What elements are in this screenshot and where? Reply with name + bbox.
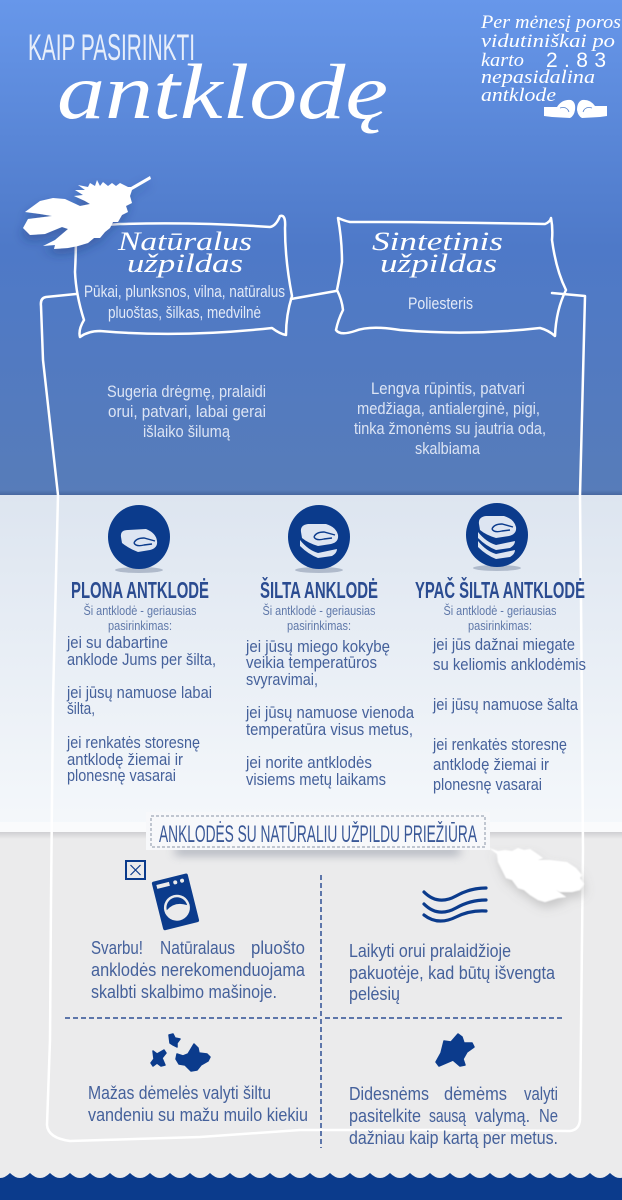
list: warm blanket: visiems metų laikams	[246, 771, 386, 789]
text: large stains: dėmėms	[444, 1084, 507, 1104]
description: natural	[84, 282, 285, 322]
text: synthetic properties: Lengva rūpintis, patvari	[371, 380, 525, 398]
text: washing warning: Natūralaus	[160, 938, 235, 958]
text: large stains: sausą	[429, 1106, 467, 1126]
list: extra warm blanket: su keliomis anklodėmis	[433, 656, 586, 674]
text: storage advice	[349, 941, 556, 1004]
subheading: warm blanket	[262, 603, 376, 633]
panel: synthetic filling	[336, 218, 566, 336]
panel: washing warning	[91, 861, 306, 1002]
list: thin blanket	[66, 634, 216, 785]
text: synthetic properties: skalbiama	[415, 440, 481, 458]
statistic callout: karto	[481, 50, 524, 71]
subheading: warm blanket: Ši antklodė - geriausias	[262, 603, 376, 618]
icon: feather top	[23, 176, 151, 249]
list: thin blanket: jei jūsų namuose labai	[66, 684, 212, 702]
heading: synthetic: Sintetinis	[372, 227, 503, 256]
background: blue top section	[0, 0, 622, 495]
text: small stains: vandeniu su mažu muilo kiekiu	[88, 1105, 308, 1125]
statistic callout: antklode	[481, 85, 556, 106]
list: extra warm blanket: jei jūsų namuose šalta	[432, 696, 579, 714]
list: thin blanket: šilta,	[67, 700, 95, 718]
panel: natural filling	[75, 216, 292, 337]
subheading: thin blanket: Ši antklodė - geriausias	[84, 603, 197, 618]
list: extra warm blanket	[432, 636, 586, 794]
statistic callout: nepasidalina	[481, 67, 595, 88]
list: thin blanket: plonesnę vasarai	[67, 767, 176, 785]
heading: warm blanket: ŠILTA ANKLODĖ	[260, 576, 378, 603]
icon: two folded blankets	[288, 505, 350, 573]
background: grey care section	[0, 832, 622, 1200]
text: small stains: Mažas dėmelės valyti šiltu	[88, 1083, 271, 1103]
panel: small stains	[88, 1034, 308, 1125]
list: warm blanket: jei norite antklodės	[245, 754, 372, 772]
text: synthetic properties: medžiaga, antialerginė, pigi,	[357, 400, 540, 418]
panel: large stains	[349, 1034, 558, 1148]
text: large stains: pasitelkite	[349, 1106, 421, 1126]
icon: boxing gloves	[544, 100, 607, 118]
title script word: antklodę	[57, 48, 388, 135]
text: large stains: valyti	[524, 1084, 558, 1104]
icon: three folded blankets	[466, 503, 528, 571]
list: warm blanket: svyravimai,	[246, 671, 318, 689]
text: natural properties: išlaiko šilumą	[143, 423, 231, 441]
list: thin blanket: antklodę žiemai ir	[67, 751, 183, 769]
text: synthetic properties: tinka žmonėms su jautria oda,	[354, 420, 546, 438]
heading: natural: užpildas	[127, 249, 243, 278]
list: warm blanket: jei jūsų miego kokybę	[245, 638, 390, 656]
icon: one folded blanket	[108, 505, 170, 573]
description: natural: pluoštas, šilkas, medvilnė	[108, 303, 261, 322]
list: warm blanket: veikia temperatūros	[246, 654, 377, 672]
statistic callout: vidutiniškai po	[481, 31, 615, 52]
heading: thin blanket: PLONA ANTKLODĖ	[71, 577, 209, 603]
list: thin blanket: anklode Jums per šilta,	[67, 651, 216, 669]
text: natural properties: orui, patvari, labai gerai	[108, 403, 266, 421]
icon: feather bottom	[489, 848, 584, 902]
description: natural: Pūkai, plunksnos, vilna, natūralus	[84, 282, 285, 301]
text: washing warning	[91, 938, 306, 1002]
list: extra warm blanket: jei jūs dažnai miegate	[432, 636, 575, 654]
text: large stains: Ne	[539, 1106, 558, 1126]
text: storage advice: pelėsių	[349, 984, 400, 1004]
dashed dividers	[65, 875, 562, 1148]
heading: natural	[117, 227, 252, 278]
icon: washing machine	[151, 873, 199, 931]
text: washing warning: Svarbu!	[91, 938, 143, 958]
section heading: care	[146, 812, 490, 854]
list: thin blanket: jei su dabartine	[66, 634, 168, 652]
text: washing warning: skalbti skalbimo mašinoje.	[91, 982, 277, 1002]
pillow outline: synthetic	[336, 218, 566, 336]
text: washing warning: anklodės nerekomenduojama	[91, 960, 306, 980]
list: extra warm blanket: plonesnę vasarai	[433, 776, 542, 794]
panel: warm blanket	[245, 505, 415, 789]
list: extra warm blanket: jei renkatės storesnę	[432, 736, 567, 754]
icon: large stain	[436, 1034, 474, 1066]
hand-drawn white frame	[41, 291, 585, 1141]
list: extra warm blanket: antklodę žiemai ir	[433, 756, 549, 774]
subheading: extra warm blanket	[444, 603, 557, 633]
panel: thin blanket	[66, 505, 216, 785]
title line 1: KAIP PASIRINKTI	[28, 27, 195, 68]
text: natural properties: Sugeria drėgmę, pralaidi	[107, 383, 266, 401]
list: warm blanket	[245, 638, 415, 789]
statistic callout: Per mėnesį poros	[480, 12, 621, 33]
background: pale blankets section	[0, 495, 622, 832]
subheading: warm blanket: pasirinkimas:	[287, 618, 351, 633]
text: natural properties	[107, 383, 266, 441]
text: large stains	[349, 1084, 558, 1148]
subheading: thin blanket	[84, 603, 197, 633]
text: washing warning: pluošto	[251, 938, 305, 958]
text: large stains: valymą.	[475, 1106, 530, 1126]
text: large stains: Didesnėms	[349, 1084, 429, 1104]
list: warm blanket: temperatūra visus metus,	[246, 721, 413, 739]
text: storage advice: Laikyti orui pralaidžioje	[349, 941, 511, 961]
footer wave	[0, 1170, 622, 1200]
heading: synthetic: užpildas	[380, 249, 497, 278]
list: thin blanket: jei renkatės storesnę	[66, 734, 200, 752]
heading: natural: Natūralus	[117, 227, 252, 256]
statistic callout	[480, 12, 621, 118]
text: storage advice: pakuotėje, kad būtų išvengta	[349, 963, 556, 983]
statistic callout: 2.83	[546, 49, 606, 72]
panel: storage advice	[349, 888, 556, 1004]
icon: small stains	[151, 1034, 210, 1071]
panel: extra warm blanket	[415, 503, 586, 794]
text: large stains: dažniau kaip kartą per metus.	[349, 1128, 558, 1148]
description: synthetic: Poliesteris	[408, 294, 473, 313]
title	[28, 27, 388, 135]
heading: synthetic	[372, 227, 503, 278]
text: synthetic properties	[354, 380, 546, 458]
subheading: extra warm blanket: Ši antklodė - geriausias	[444, 603, 557, 618]
list: warm blanket: jei jūsų namuose vienoda	[245, 704, 415, 722]
icon: crossed-out box	[126, 861, 145, 879]
text: small stains	[88, 1083, 308, 1125]
subheading: extra warm blanket: pasirinkimas:	[468, 618, 532, 633]
pillow outline: natural	[75, 216, 292, 337]
icon: air waves	[424, 888, 486, 921]
subheading: thin blanket: pasirinkimas:	[108, 618, 172, 633]
